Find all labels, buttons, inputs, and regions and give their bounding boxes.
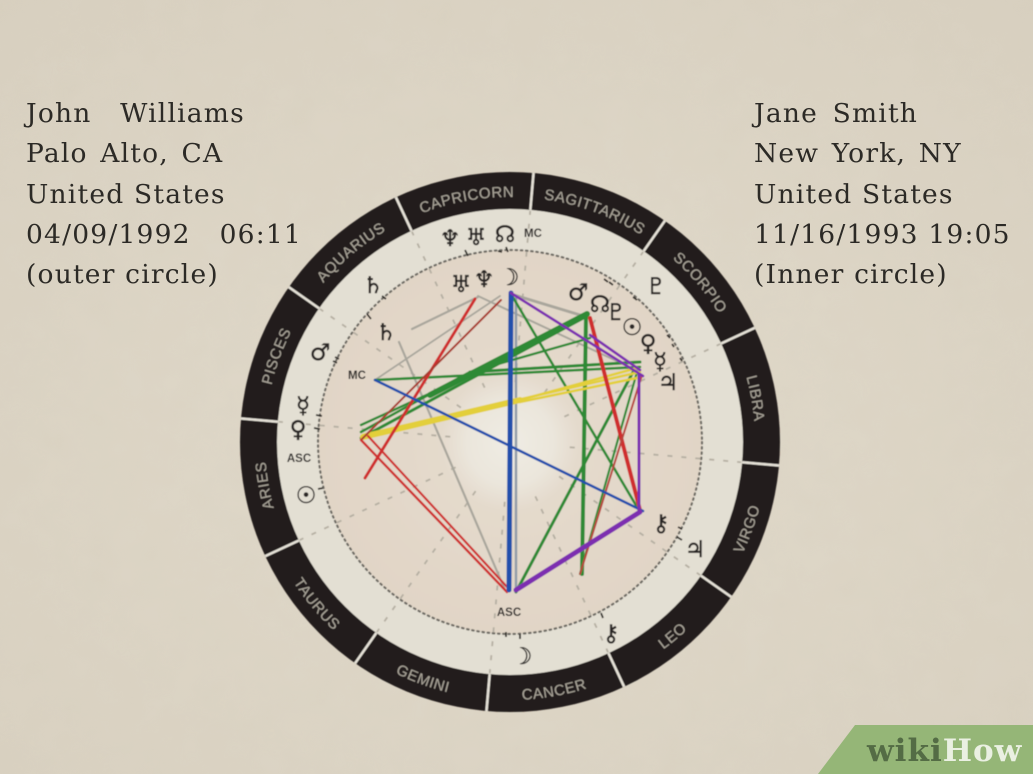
planet glyphs: inner circle: ♅ [451, 272, 471, 298]
planet glyphs: inner circle: ♆ [474, 267, 494, 293]
planet glyphs: outer circle: ☿ [296, 393, 310, 419]
house division dotted lines [279, 211, 741, 673]
zodiac sign labels: AQUARIUS [318, 222, 385, 284]
zodiac sign labels: SAGITTARIUS [544, 188, 646, 234]
logo: wikiHow banner [818, 725, 1033, 774]
yellow aspect lines [363, 368, 640, 437]
text block: John Williams details: John Williams [23, 98, 245, 129]
zodiac sign labels: CAPRICORN [419, 186, 514, 213]
planet glyphs: outer circle: ♆ [440, 226, 460, 252]
planet glyphs: outer circle: ☽ [512, 644, 532, 670]
planet glyphs: inner circle: ☊ [590, 292, 610, 318]
zodiac sign labels: GEMINI [396, 664, 450, 693]
zodiac sign labels: LEO [657, 624, 686, 650]
planet glyphs: inner circle: ♂ [568, 280, 588, 306]
aspect lines [361, 293, 643, 592]
planet tick marks [314, 247, 682, 639]
chart: astrological wheel [239, 171, 781, 713]
planet glyphs: outer circle: ☊ [495, 222, 515, 248]
planet glyphs: inner circle: ☽ [499, 265, 519, 291]
planet glyphs: outer circle: ☉ [296, 483, 316, 509]
text block: John Williams details [23, 98, 302, 290]
chart angle labels: ASC [287, 453, 311, 465]
text block: Jane Smith details: (Inner circle) [754, 259, 948, 290]
planet glyphs: inner circle: ♃ [658, 370, 678, 396]
text block: John Williams details: Palo Alto, CA [26, 138, 223, 169]
inner disc [318, 250, 702, 634]
planet glyphs: outer circle: ♇ [646, 274, 666, 300]
zodiac sign labels [254, 186, 765, 700]
planet glyphs: outer circle: ♂ [310, 340, 330, 366]
text block: John Williams details: (outer circle) [26, 259, 219, 290]
grey aspect lines [375, 294, 640, 590]
planet glyphs: inner circle: ☿ [653, 349, 667, 375]
text block: John Williams details: United States [26, 179, 226, 210]
planet glyphs: outer circle: ♅ [466, 225, 486, 251]
purple aspect lines [511, 293, 643, 590]
zodiac sign labels: LIBRA [746, 374, 765, 422]
planet glyphs: inner circle [376, 265, 678, 396]
text block: Jane Smith details [751, 98, 1011, 290]
planet glyphs: inner circle: ♄ [376, 320, 396, 346]
planet glyphs: outer circle: ♃ [685, 537, 705, 563]
red aspect lines [361, 299, 642, 592]
text block: Jane Smith details: Jane Smith [751, 98, 918, 129]
logo: wikiHow banner: wikiHow [866, 733, 1023, 769]
zodiac sign labels: VIRGO [732, 505, 760, 552]
green aspect lines [361, 294, 640, 592]
chart angle labels: ASC [497, 607, 521, 619]
planet glyphs: outer circle: ♀ [290, 417, 306, 443]
text block: John Williams details: 04/09/1992 06:11 [26, 219, 302, 250]
planet glyphs: outer circle: ⚷ [653, 511, 669, 537]
chart angle labels [287, 228, 542, 619]
planet glyphs: inner circle: ☉ [622, 315, 642, 341]
planet glyphs: outer circle: ♄ [363, 273, 383, 299]
zodiac sign labels: CANCER [522, 678, 587, 700]
planet glyphs: outer circle: ⚷ [603, 621, 619, 647]
blue aspect lines [375, 293, 643, 590]
planet glyphs: outer circle [290, 222, 705, 670]
text block: Jane Smith details: 11/16/1993 19:05 [754, 219, 1011, 250]
planet glyphs: inner circle: ♇ [606, 300, 626, 326]
chart angle labels: MC [524, 228, 542, 240]
zodiac ring [240, 172, 780, 712]
zodiac sign labels: PISCES [261, 328, 291, 385]
zodiac sign labels: SCORPIO [673, 252, 726, 312]
text block: Jane Smith details: New York, NY [754, 138, 962, 169]
zodiac sign labels: TAURUS [295, 576, 340, 630]
planet glyphs: inner circle: ♀ [640, 331, 656, 357]
zodiac sign labels: ARIES [254, 462, 274, 509]
text block: Jane Smith details: United States [754, 179, 954, 210]
chart angle labels: MC [348, 370, 366, 382]
